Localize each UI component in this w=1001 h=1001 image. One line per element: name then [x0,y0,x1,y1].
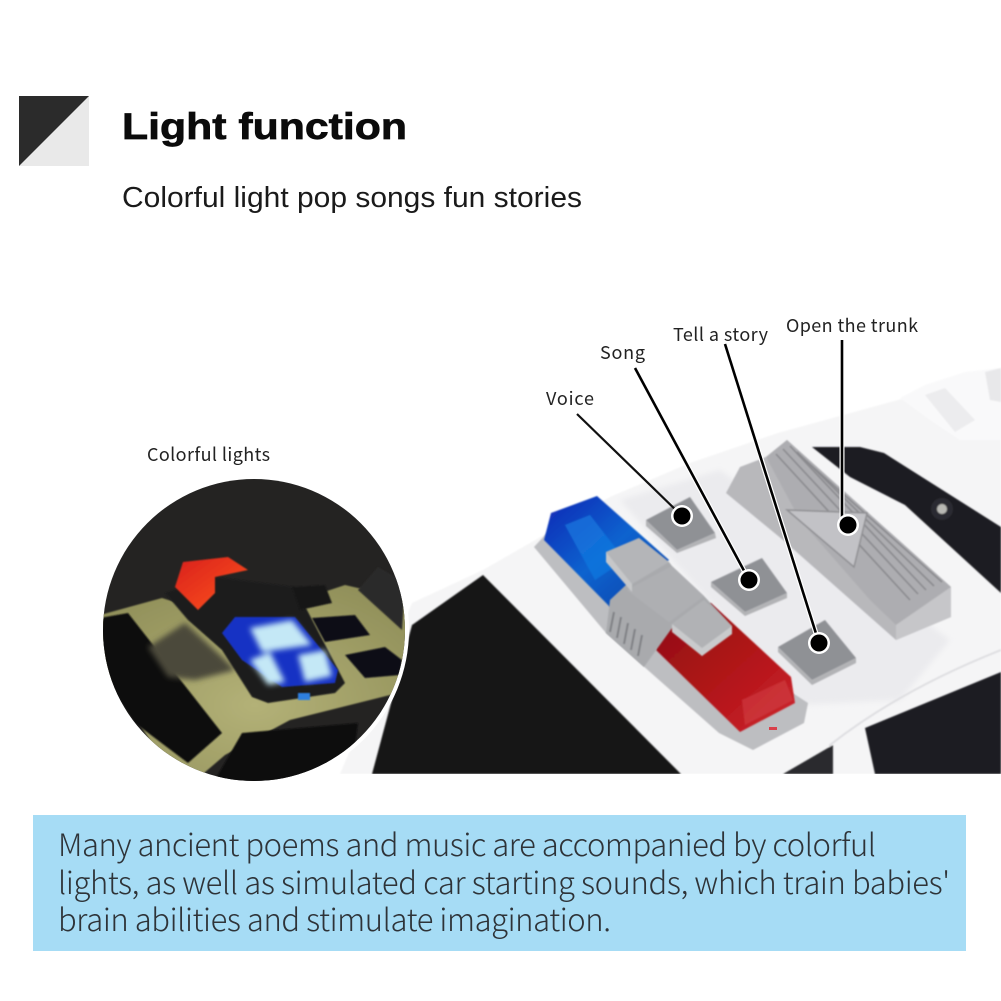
description text: lights, as well as simulated car starting sounds, which train babies' [58,858,950,903]
blue light [544,496,669,607]
title: Light function [122,106,407,147]
light bar base [534,533,808,750]
label: tell a story: Tell a story [673,321,769,347]
pointer: open the trunk [837,340,859,536]
roof shadow [148,623,235,680]
car roof photo illustration [340,368,1001,774]
blue beacon [222,617,338,687]
description text [58,820,950,940]
small indicator [769,727,777,730]
light base [165,577,345,703]
buttons [646,497,856,685]
description text: brain abilities and stimulate imagination. [58,895,611,940]
side windows [783,650,1001,774]
rear antenna detail [928,368,1001,430]
red light [656,603,795,732]
rear dark block [358,567,405,630]
icon: header square [19,96,89,166]
subtitle: Colorful light pop songs fun stories [122,182,582,214]
windshield [372,575,681,774]
trunk panel [726,440,951,640]
roof highlight [620,470,950,705]
description text: Many ancient poems and music are accompanied by colorful [58,820,876,865]
pointer: song [635,368,760,591]
light bar centre block [606,538,732,667]
pointer: voice [577,414,693,527]
pointer: tell a story [725,344,830,654]
inset circle: colorful lights photo [99,475,410,790]
rear window [812,447,1001,593]
label: colorful lights: Colorful lights [147,441,270,467]
illuminated roof [100,585,410,785]
label: voice: Voice [546,385,594,411]
car body [340,370,1001,774]
dark buttons [292,585,402,678]
bottom window [216,722,358,781]
label: song: Song [600,339,645,365]
description panel [33,815,966,951]
red beacon [175,557,248,610]
blue beacon glow [250,620,332,685]
left window [100,613,222,763]
label: open the trunk: Open the trunk [786,312,918,338]
